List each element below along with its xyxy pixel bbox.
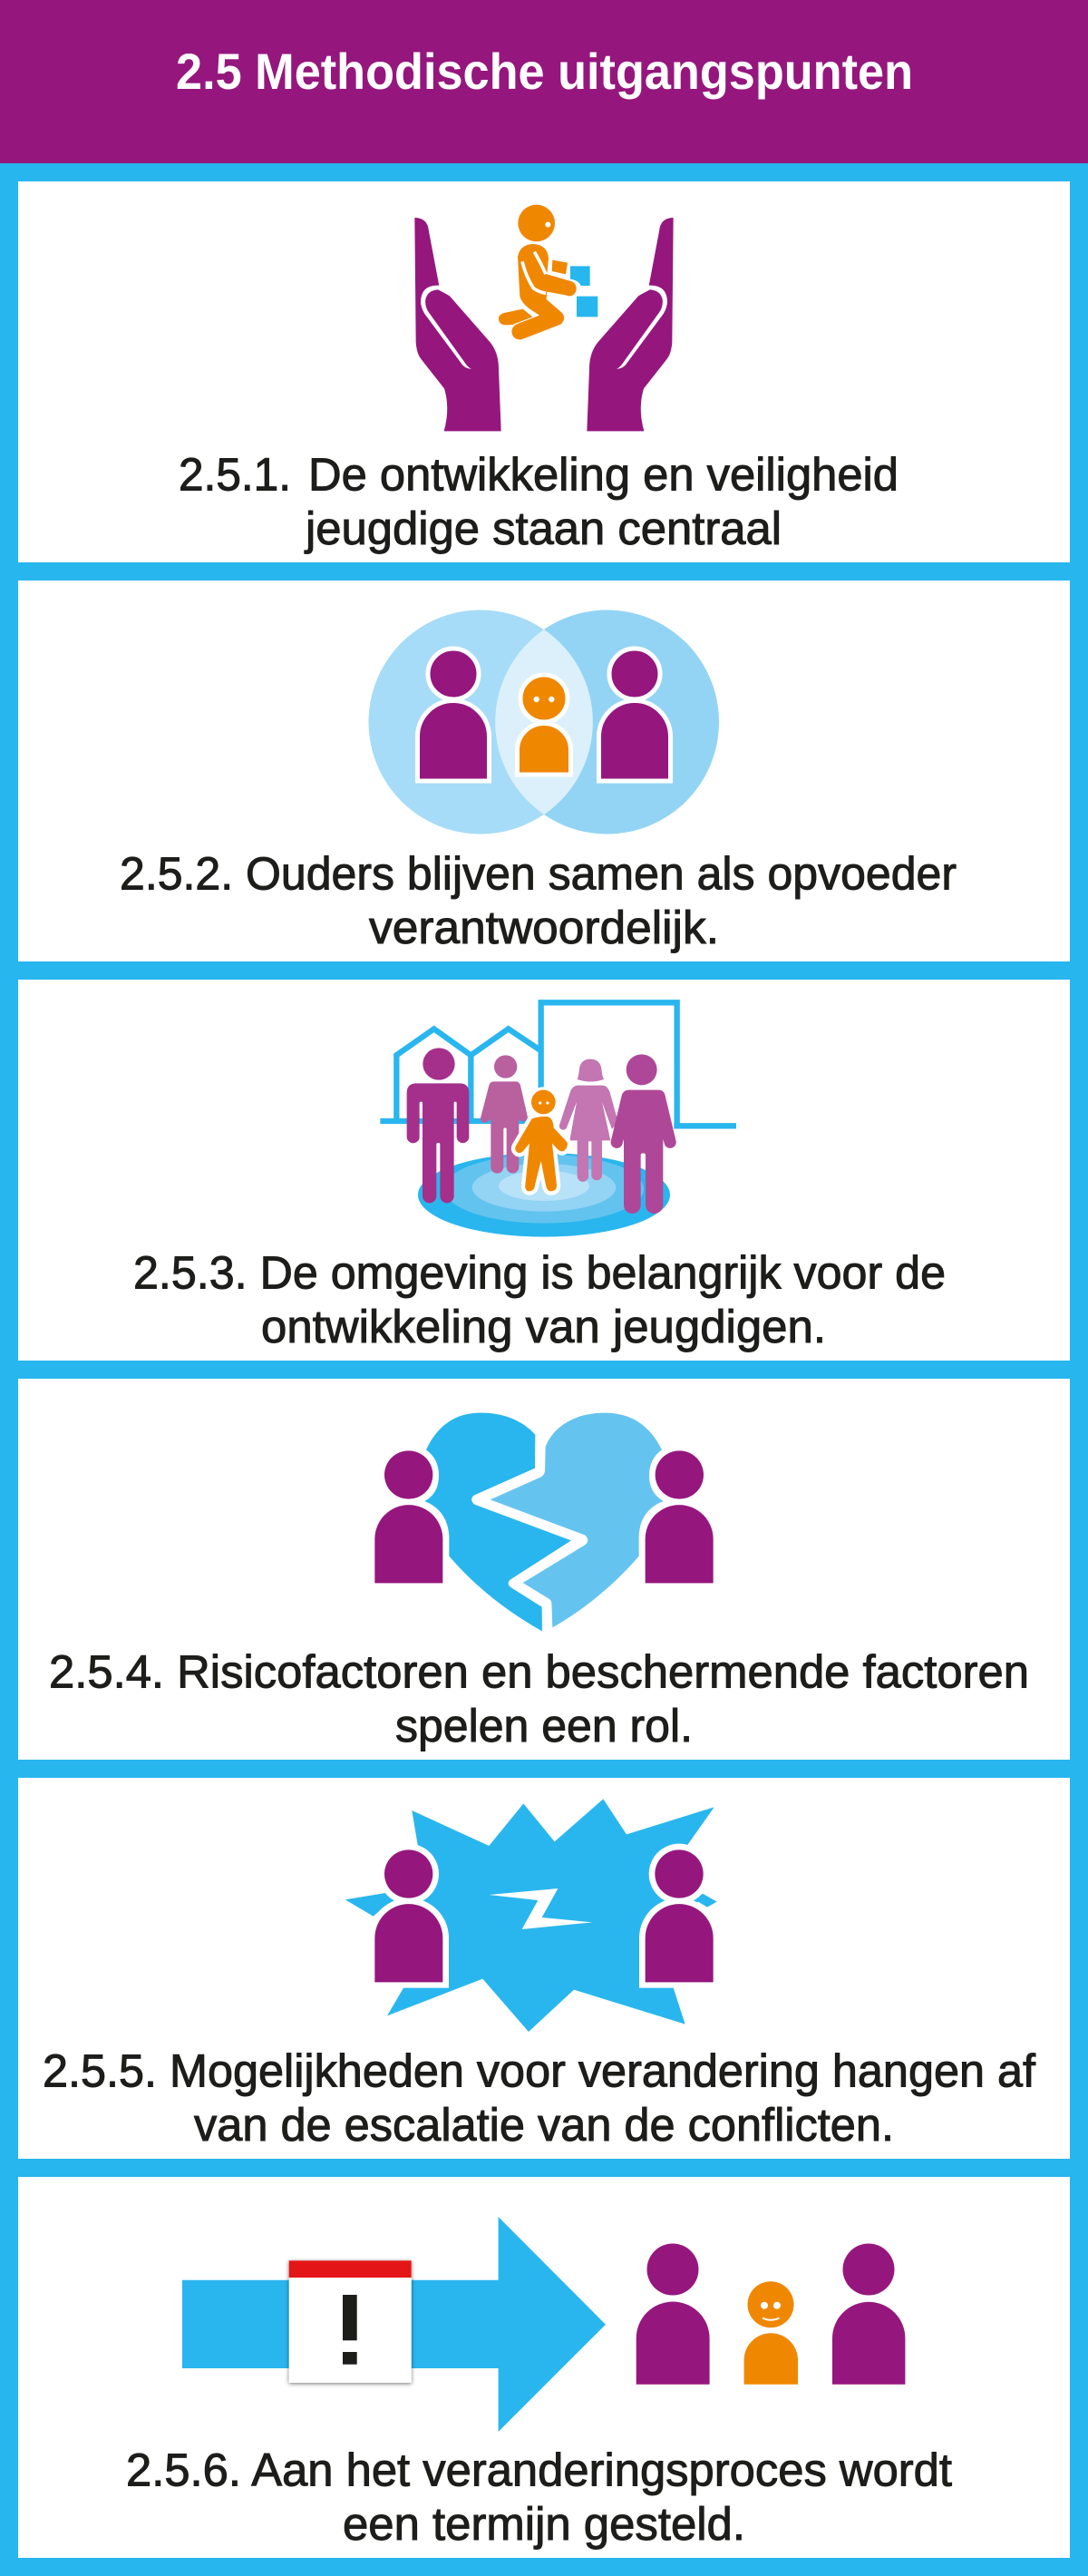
- icon: mother: [611, 1054, 676, 1214]
- icon: left person: [374, 1450, 442, 1583]
- caption 2.5.1: De ontwikkeling en veiligheid: [308, 449, 899, 501]
- panel: 2.5.6 time limit on change: [18, 2177, 1070, 2558]
- panel: 2.5.4 risk and protective factors: [18, 1379, 1070, 1760]
- title banner: [0, 0, 1088, 163]
- icon: child playing with blocks: [499, 205, 597, 339]
- caption 2.5.5: van de escalatie van de conflicten.: [194, 2099, 894, 2151]
- arrow: [182, 2217, 606, 2432]
- icon: burst: [345, 1799, 717, 2032]
- caption 2.5.6: 2.5.6. Aan het veranderingsproces wordt: [126, 2444, 952, 2496]
- icon: girl: [559, 1059, 618, 1182]
- caption 2.5.6: [126, 2444, 952, 2550]
- panel: 2.5.3 environment: [18, 980, 1070, 1361]
- title banner: 2.5 Methodische uitgangspunten: [176, 43, 913, 100]
- panel: 2.5.1 development and safety: [18, 181, 1070, 562]
- icon: left heart half: [424, 1413, 571, 1631]
- icon: left person: [369, 1844, 449, 1988]
- caption 2.5.4: spelen een rol.: [395, 1700, 693, 1751]
- icon: lightning bolt: [489, 1888, 592, 1929]
- icon: family with houses and ripples: [380, 1002, 736, 1237]
- caption 2.5.4: [49, 1646, 1029, 1751]
- caption 2.5.2: verantwoordelijk.: [369, 902, 719, 953]
- caption 2.5.4: 2.5.4. Risicofactoren en beschermende factoren: [49, 1646, 1029, 1698]
- caption 2.5.2: [120, 848, 957, 953]
- caption 2.5.5: 2.5.5. Mogelijkheden voor verandering hangen af: [43, 2045, 1036, 2097]
- icon: right heart half: [491, 1413, 664, 1627]
- caption 2.5.1: 2.5.1.: [179, 449, 291, 501]
- icon: right person: [646, 1450, 714, 1583]
- icon: parents and child: [636, 2244, 905, 2385]
- icon: father: [407, 1048, 469, 1203]
- icon: calendar with exclamation mark: [289, 2260, 412, 2383]
- icon: child: [744, 2281, 798, 2385]
- icon: houses and ground line: [380, 1002, 736, 1126]
- caption 2.5.2: 2.5.2. Ouders blijven samen als opvoeder: [120, 848, 957, 900]
- icon: right parent: [598, 649, 671, 781]
- icon: ripple ellipses: [418, 1153, 670, 1237]
- icon: left parent: [636, 2244, 710, 2385]
- caption 2.5.3: [133, 1247, 946, 1352]
- panel: 2.5.5 escalation of conflict: [18, 1778, 1070, 2159]
- icon: left hand: [414, 218, 501, 431]
- panel: 2.5.2 parents remain responsible: [18, 581, 1070, 961]
- icon: right person: [639, 1844, 719, 1988]
- icon: boy: [481, 1055, 528, 1174]
- icon: child in centre: [515, 1090, 568, 1191]
- caption 2.5.1: jeugdige staan centraal: [304, 503, 782, 554]
- caption 2.5.3: 2.5.3. De omgeving is belangrijk voor de: [133, 1247, 946, 1299]
- icon: hands protecting child with blocks: [414, 205, 674, 431]
- caption 2.5.3: ontwikkeling van jeugdigen.: [261, 1301, 826, 1352]
- icon: broken heart with two people: [374, 1413, 714, 1631]
- icon: right parent: [832, 2244, 905, 2385]
- icon: right hand: [587, 218, 674, 431]
- icon: overlapping circles with parents and child: [368, 610, 719, 834]
- icon: child: [517, 675, 571, 775]
- caption 2.5.6: een termijn gesteld.: [343, 2498, 745, 2550]
- caption 2.5.1: [179, 449, 899, 554]
- icon: conflict burst with two people: [345, 1799, 719, 2032]
- caption 2.5.5: [43, 2045, 1036, 2151]
- icon: left parent: [417, 649, 490, 781]
